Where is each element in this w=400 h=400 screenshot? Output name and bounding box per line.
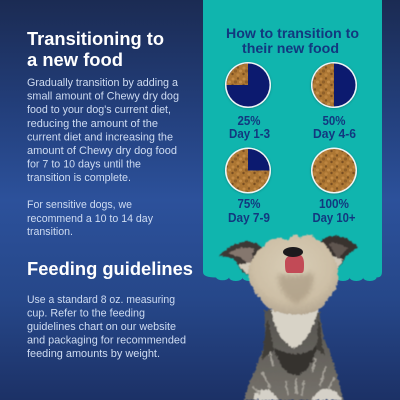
label: 25% day 1-3: 25% bbox=[238, 114, 260, 128]
label: 100% day 10+: Day 10+ bbox=[312, 211, 356, 225]
label: 75% day 7-9: Day 7-9 bbox=[228, 211, 270, 225]
label: 100% day 10+: 100% bbox=[319, 197, 349, 211]
label: 75% day 7-9: 75% bbox=[238, 197, 260, 211]
chin shadow bbox=[278, 272, 313, 304]
heading: transitioning: a new food bbox=[27, 50, 123, 70]
text block: feeding guidelines: Use a standard 8 oz. measuring bbox=[27, 294, 175, 306]
text block: transition instructions: for 7 to 10 days until the bbox=[27, 158, 141, 170]
heading: how to transition: their new food bbox=[242, 40, 339, 56]
text block: feeding guidelines: and packaging for recommended bbox=[27, 335, 186, 347]
text block: sensitive dogs: transition. bbox=[27, 226, 73, 238]
label: 75% day 7-9 bbox=[228, 197, 270, 225]
text block: transition instructions: transition is complete. bbox=[27, 172, 131, 184]
text block: transition instructions: reducing the amount of the bbox=[27, 118, 158, 130]
pie: 75% day 7-9 bbox=[225, 148, 271, 194]
text block: transition instructions: food to your dog's current diet, bbox=[27, 104, 171, 116]
panel: transition guide with scalloped edge bbox=[203, 0, 382, 281]
text block: sensitive dogs bbox=[27, 199, 153, 238]
text block: transition instructions bbox=[27, 77, 179, 184]
heading: feeding guidelines: Feeding guidelines bbox=[27, 259, 193, 279]
pie: 50% day 4-6 bbox=[311, 62, 357, 108]
heading: how to transition bbox=[226, 25, 359, 56]
label: 50% day 4-6: 50% bbox=[322, 114, 346, 128]
text block: transition instructions: current diet and increasing the bbox=[27, 132, 173, 144]
head bbox=[248, 234, 338, 315]
dog body bbox=[244, 310, 343, 400]
heading: how to transition: How to transition to bbox=[226, 25, 359, 41]
heading: transitioning: Transitioning to bbox=[27, 29, 164, 49]
text block: transition instructions: amount of Chewy dry dog food bbox=[27, 145, 177, 157]
dog chest markings bbox=[252, 310, 342, 400]
text block: sensitive dogs: recommend a 10 to 14 day bbox=[27, 213, 153, 225]
text block: feeding guidelines bbox=[27, 294, 186, 360]
text block: feeding guidelines: cup. Refer to the feeding bbox=[27, 308, 145, 320]
left ear bbox=[219, 242, 262, 276]
text block: transition instructions: Gradually transition by adding a bbox=[27, 77, 179, 89]
text block: feeding guidelines: guidelines chart on our website bbox=[27, 321, 176, 333]
text block: sensitive dogs: For sensitive dogs, we bbox=[27, 199, 132, 211]
dog illustration bbox=[219, 234, 358, 400]
label: 25% day 1-3: Day 1-3 bbox=[229, 127, 270, 141]
pie: 25% day 1-3 bbox=[225, 62, 271, 108]
tongue bbox=[285, 254, 304, 273]
right ear bbox=[321, 236, 358, 268]
text block: feeding guidelines: feeding amounts by weight. bbox=[27, 348, 160, 360]
heading: transitioning bbox=[27, 29, 164, 70]
label: 100% day 10+ bbox=[312, 197, 356, 225]
nose bbox=[283, 247, 303, 257]
pie: 100% day 10+ bbox=[311, 148, 357, 194]
label: 25% day 1-3 bbox=[229, 114, 270, 141]
text block: transition instructions: small amount of Chewy dry dog bbox=[27, 91, 179, 103]
label: 50% day 4-6: Day 4-6 bbox=[313, 127, 356, 141]
label: 50% day 4-6 bbox=[313, 114, 356, 141]
